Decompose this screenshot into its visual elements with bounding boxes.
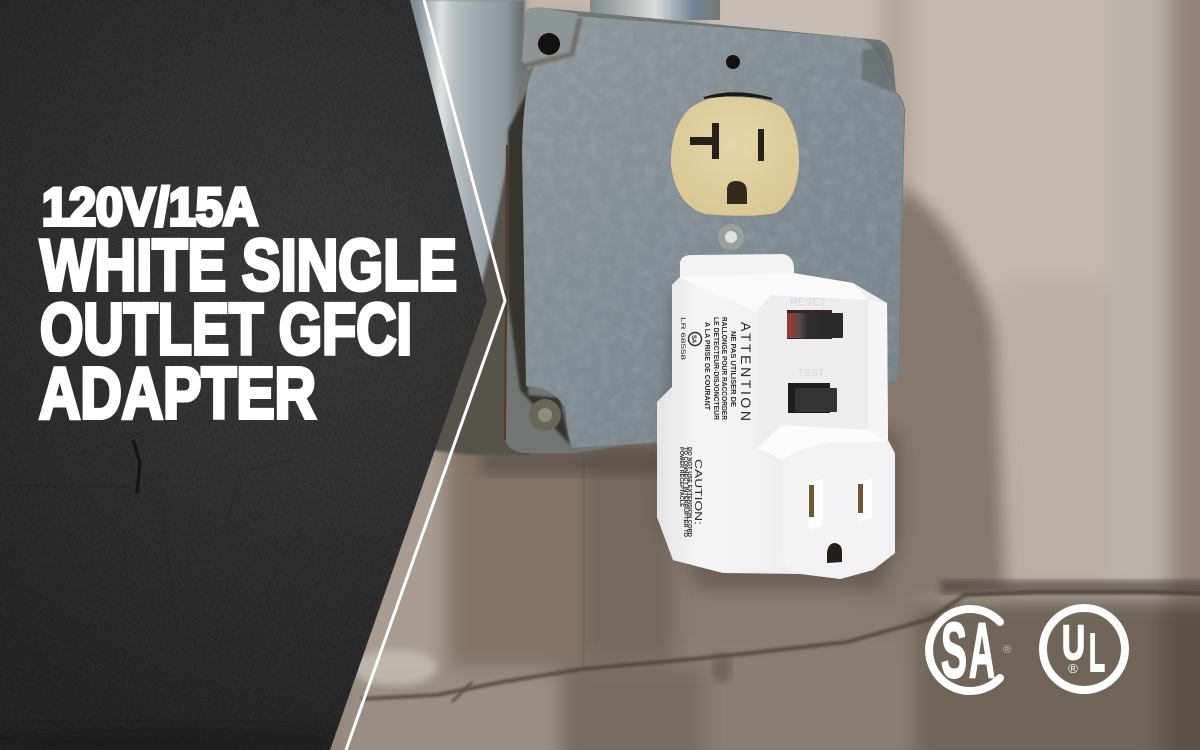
top bevel: [680, 273, 868, 312]
CSA registered mark: ®: [1003, 644, 1011, 656]
socket face: [783, 442, 895, 579]
english warning text: TO CONNECT INTERRUPTER TO: [682, 447, 688, 537]
english warning text: DO NOT USE EXTENSION CORD: [686, 447, 692, 537]
lower conduit shadow area: [430, 130, 535, 455]
button recess panel: [770, 295, 868, 430]
title line 4: ADAPTER: [39, 354, 316, 434]
UL registered mark: ®: [1068, 661, 1078, 676]
box texture: [526, 33, 904, 447]
box corner rust shading: [524, 18, 580, 66]
top screw hole: [726, 55, 740, 69]
licence number: LR 68558: [679, 317, 685, 361]
left box rust mark: [505, 145, 507, 440]
dark scratch: [133, 440, 140, 494]
bottom grime: [256, 735, 314, 748]
french warning text: LE DETECTEUR-DISJONCTEUR: [712, 317, 719, 420]
wall crack mark: [452, 682, 472, 702]
reset button: [787, 310, 843, 339]
UL logo: L: [1089, 623, 1105, 683]
title: [39, 178, 457, 434]
pale patch on the wall: [353, 650, 437, 686]
cover screw: [718, 224, 744, 250]
UL logo: U: [1062, 617, 1085, 670]
panel grunge texture: [6, 0, 479, 646]
junction box cover: [505, 8, 910, 455]
title line 1: 120V/15A: [42, 178, 258, 237]
outlet T slot: [690, 123, 719, 159]
socket right slot: [857, 479, 872, 521]
title line 3: OUTLET GFCI: [40, 290, 412, 370]
dark band behind logos: [940, 580, 1200, 594]
top-left flange: [522, 8, 578, 70]
test button: [788, 383, 837, 413]
top conduit pipe: [590, 0, 720, 20]
socket left slot: [808, 479, 823, 529]
outlet ground hole: [727, 181, 747, 204]
lower bevel: [757, 425, 888, 460]
CSA mini mark: SA: [690, 335, 696, 344]
reset label: RESET: [790, 297, 826, 308]
french warning text: [703, 317, 736, 420]
french warning text: A LA PRISE DE COURANT: [703, 322, 710, 411]
panel scratches: [0, 430, 292, 638]
certification logos: [929, 606, 1125, 694]
junction box flange: [504, 8, 905, 453]
socket ground hole: [827, 543, 842, 563]
french warning text: RALLONGE POUR RACCORDER: [720, 317, 727, 420]
GFCI adapter: [657, 254, 900, 590]
outlet right slot: [758, 129, 764, 161]
UL logo: [1043, 608, 1125, 690]
bottom-left screw: [529, 399, 561, 431]
left face shading: [657, 277, 783, 573]
wall anchor mark: [712, 653, 732, 683]
CSA logo: S: [941, 606, 967, 694]
english warning text: POWER RECEPTACLE: [678, 447, 684, 508]
background photo: wall, conduit and junction box: [330, 0, 1200, 750]
top-left screw hole: [538, 33, 560, 55]
mortar lines: [361, 460, 1200, 699]
ATTENTION label: ATTENTION: [738, 322, 754, 421]
right bevel: [868, 300, 888, 440]
english warning text: [678, 447, 692, 537]
CSA logo: [929, 606, 1011, 694]
shadow of box and adapter on the wall: [860, 185, 1006, 610]
adapter top tab: [680, 254, 794, 280]
dark left panel: [0, 0, 490, 750]
french warning text: NE PAS UTILISER DE: [729, 331, 736, 407]
left side dark recess: [508, 90, 570, 445]
cream wall outlet: [671, 93, 799, 216]
left conduit pipe: [405, 0, 525, 310]
adapter drop shadow: [660, 290, 900, 590]
test label: TEST: [798, 368, 824, 379]
right-corner tab shadow: [862, 45, 892, 92]
CAUTION label: CAUTION:: [692, 459, 703, 525]
white chevron line: [346, 0, 505, 750]
title line 2: WHITE SINGLE: [40, 226, 457, 306]
CSA logo: A: [969, 606, 995, 694]
shadow under box: [480, 450, 830, 474]
CSA mini mark: [688, 332, 702, 346]
adapter body: [657, 273, 895, 579]
outlet top shadow: [704, 93, 772, 99]
